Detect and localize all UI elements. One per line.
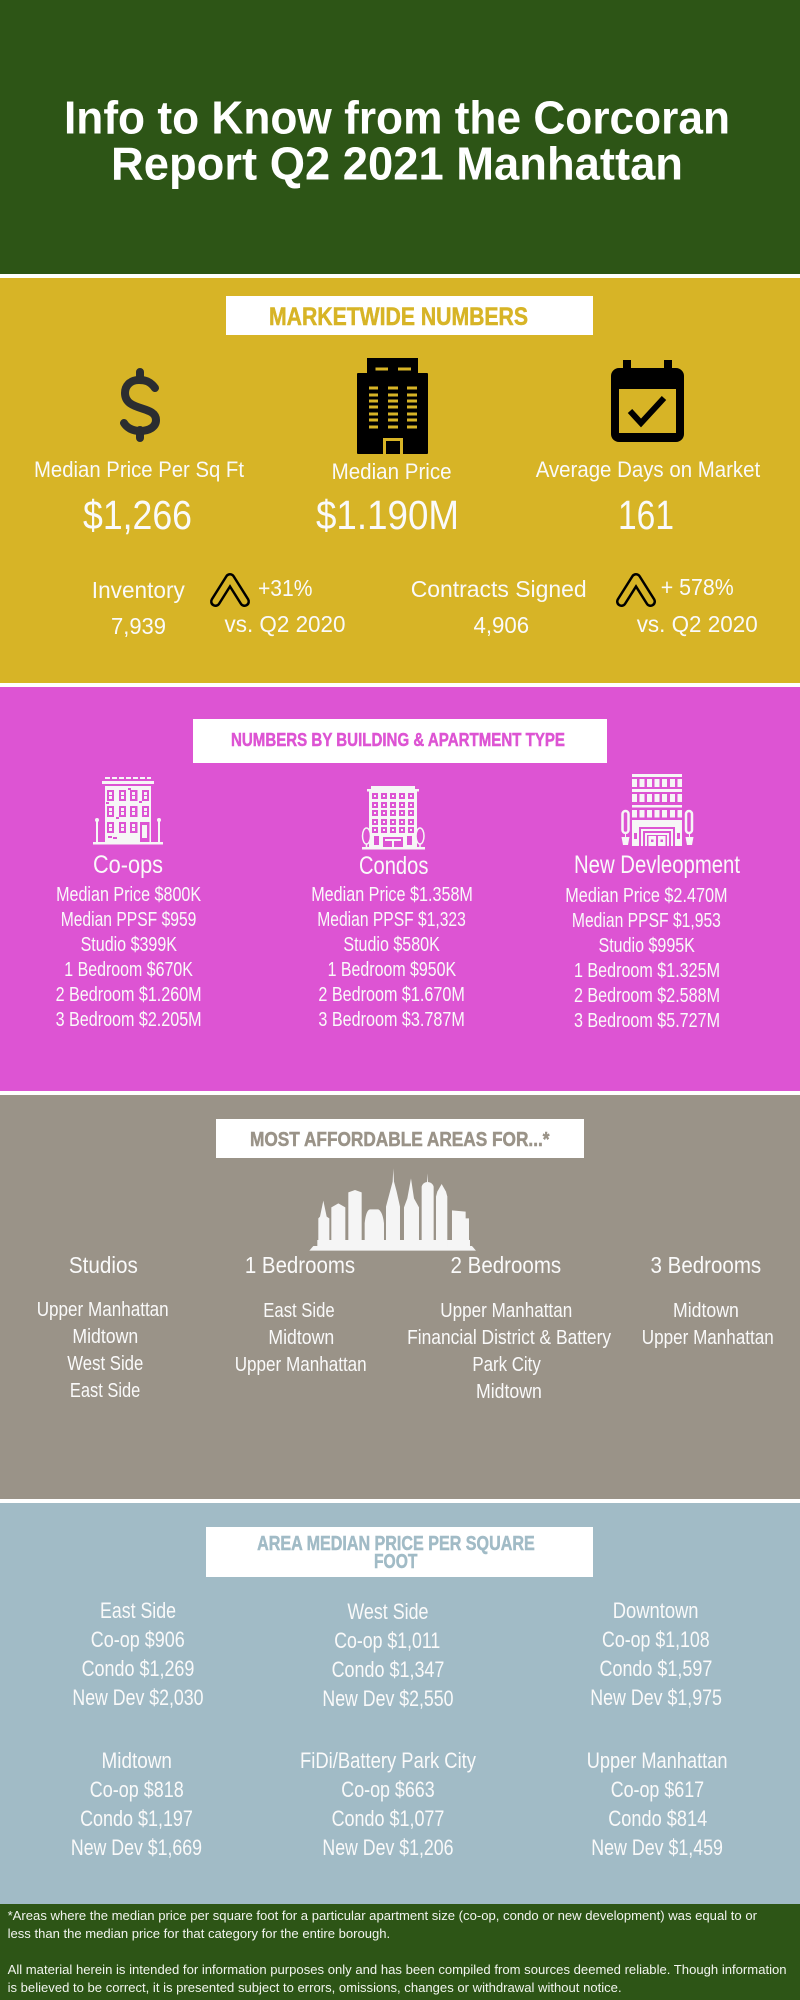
area: upper manhattan: Condo $814 xyxy=(608,1806,707,1831)
icon: dollar sign xyxy=(124,372,156,438)
list: co-op prices: Median Price $800K xyxy=(56,884,202,906)
list: new development prices: Median Price $2.470M xyxy=(565,885,728,907)
stat: average days on market xyxy=(536,457,760,538)
column: 1 bedrooms: Upper Manhattan xyxy=(235,1354,367,1376)
icon: office building xyxy=(357,358,428,454)
list: condo prices xyxy=(311,884,473,1031)
stat: median price per sq ft: $1,266 xyxy=(83,492,192,538)
label: condos: Condos xyxy=(359,852,428,880)
column: 2 bedrooms: Financial District & Battery xyxy=(407,1327,611,1349)
stat: inventory change: vs. Q2 2020 xyxy=(224,611,346,637)
area: west side xyxy=(322,1599,454,1711)
area: west side: Co-op $1,011 xyxy=(334,1628,440,1653)
panel: numbers by building and apartment type xyxy=(0,687,800,1091)
list: co-op prices: 1 Bedroom $670K xyxy=(64,959,193,981)
heading: marketwide numbers: MARKETWIDE NUMBERS xyxy=(269,303,528,331)
area: east side: Condo $1,269 xyxy=(82,1656,194,1681)
stat: average days on market: 161 xyxy=(618,492,674,538)
area: midtown xyxy=(71,1748,202,1860)
area: fidi battery park city: New Dev $1,206 xyxy=(322,1835,454,1860)
area: downtown: New Dev $1,975 xyxy=(590,1685,722,1710)
list: co-op prices: 3 Bedroom $2.205M xyxy=(56,1009,202,1031)
footnote: disclaimer: is believed to be correct, it is presented subject to errors, omissions, changes or withdrawal without notice. xyxy=(8,1980,622,1995)
column: 1 bedrooms: 1 Bedrooms xyxy=(245,1252,355,1278)
area: downtown xyxy=(590,1598,722,1710)
heading: area median price per square foot: AREA MEDIAN PRICE PER SQUARE xyxy=(257,1533,535,1555)
footnote: areas definition xyxy=(8,1908,758,1941)
column: studios: West Side xyxy=(67,1353,143,1375)
panel: most affordable areas xyxy=(0,1095,800,1499)
footnote: areas definition: *Areas where the median price per square foot for a particular apartment size (co-op, condo or new development) was equal to or xyxy=(8,1908,758,1923)
column: studios: Midtown xyxy=(72,1326,138,1348)
area: east side xyxy=(72,1598,204,1710)
icon: co-op building xyxy=(93,777,163,844)
list: new development prices: Studio $995K xyxy=(598,935,695,957)
stat: contracts change xyxy=(637,574,758,637)
stat: inventory: Inventory xyxy=(92,577,185,603)
column: 3 bedrooms: Upper Manhattan xyxy=(642,1327,774,1349)
footnote: disclaimer: All material herein is intended for information purposes only and has been compiled from sources deemed reliable. Though information xyxy=(8,1962,787,1977)
area: midtown: New Dev $1,669 xyxy=(71,1835,202,1860)
panel: title header xyxy=(0,0,800,274)
area: fidi battery park city: Co-op $663 xyxy=(341,1777,435,1802)
area: upper manhattan: New Dev $1,459 xyxy=(591,1835,723,1860)
list: condo prices: 3 Bedroom $3.787M xyxy=(318,1009,465,1031)
icon: calendar with check xyxy=(611,360,684,442)
column: 2 bedrooms: Park City xyxy=(472,1354,541,1376)
stat: median price per sq ft: Median Price Per Sq Ft xyxy=(34,457,244,482)
footnote: disclaimer xyxy=(8,1962,787,1995)
stat: contracts signed: 4,906 xyxy=(474,612,529,638)
title: Report Q2 2021 Manhattan xyxy=(111,138,683,190)
column: 1 bedrooms: East Side xyxy=(263,1300,335,1322)
area: fidi battery park city xyxy=(300,1748,476,1860)
stat: inventory: 7,939 xyxy=(111,613,166,639)
area: upper manhattan xyxy=(587,1748,728,1860)
panel: area median price per square foot xyxy=(0,1503,800,1904)
area: fidi battery park city: Condo $1,077 xyxy=(332,1806,444,1831)
heading: numbers by building type xyxy=(193,719,607,763)
area: upper manhattan: Co-op $617 xyxy=(611,1777,704,1802)
area: east side: Co-op $906 xyxy=(91,1627,185,1652)
area: midtown: Midtown xyxy=(102,1748,172,1773)
stat: inventory change xyxy=(224,575,346,637)
stat: contracts signed xyxy=(411,576,587,638)
list: condo prices: Studio $580K xyxy=(343,934,440,956)
stat: inventory xyxy=(92,577,185,639)
list: condo prices: 2 Bedroom $1.670M xyxy=(318,984,465,1006)
area: west side: Condo $1,347 xyxy=(332,1657,444,1682)
stat: contracts signed: Contracts Signed xyxy=(411,576,587,602)
list: new development prices xyxy=(565,885,728,1032)
column: studios: Studios xyxy=(69,1252,138,1278)
heading: most affordable areas xyxy=(216,1119,584,1158)
area: east side: New Dev $2,030 xyxy=(72,1685,204,1710)
list: co-op prices: Studio $399K xyxy=(81,934,178,956)
icon: up chevron contracts xyxy=(622,578,650,602)
label: co-ops: Co-ops xyxy=(93,851,163,879)
column: 2 bedrooms xyxy=(407,1252,611,1403)
heading: area median price per square foot: FOOT xyxy=(374,1551,417,1573)
icon: new development building xyxy=(622,774,694,846)
area: east side: East Side xyxy=(100,1598,176,1623)
area: west side: New Dev $2,550 xyxy=(322,1686,454,1711)
area: downtown: Condo $1,597 xyxy=(600,1656,712,1681)
column: 1 bedrooms: Midtown xyxy=(268,1327,334,1349)
list: condo prices: Median PPSF $1,323 xyxy=(317,909,466,931)
heading: marketwide numbers xyxy=(226,296,593,335)
area: downtown: Downtown xyxy=(613,1598,698,1623)
area: downtown: Co-op $1,108 xyxy=(602,1627,710,1652)
stat: average days on market: Average Days on Market xyxy=(536,457,760,482)
list: new development prices: 3 Bedroom $5.727M xyxy=(574,1010,720,1032)
icon: city skyline xyxy=(309,1168,476,1251)
list: co-op prices: 2 Bedroom $1.260M xyxy=(56,984,202,1006)
list: new development prices: 1 Bedroom $1.325M xyxy=(574,960,720,982)
stat: inventory change: +31% xyxy=(258,575,312,601)
column: 2 bedrooms: 2 Bedrooms xyxy=(450,1252,561,1278)
column: 3 bedrooms xyxy=(642,1252,774,1349)
heading: area median price per square foot xyxy=(206,1527,593,1577)
list: condo prices: Median Price $1.358M xyxy=(311,884,473,906)
column: studios: Upper Manhattan xyxy=(37,1299,169,1321)
column: 2 bedrooms: Upper Manhattan xyxy=(440,1300,572,1322)
stat: contracts change: + 578% xyxy=(661,574,734,600)
list: co-op prices xyxy=(56,884,202,1031)
list: new development prices: 2 Bedroom $2.588M xyxy=(574,985,720,1007)
column: 3 bedrooms: Midtown xyxy=(673,1300,739,1322)
icon: condo building xyxy=(362,786,425,850)
stat: median price per sq ft xyxy=(34,457,244,538)
list: new development prices: Median PPSF $1,953 xyxy=(572,910,721,932)
column: 1 bedrooms xyxy=(235,1252,367,1376)
stat: median price: Median Price xyxy=(332,459,452,484)
area: midtown: Co-op $818 xyxy=(90,1777,184,1802)
list: condo prices: 1 Bedroom $950K xyxy=(328,959,457,981)
panel: marketwide numbers xyxy=(0,278,800,683)
heading: numbers by building type: NUMBERS BY BUILDING & APARTMENT TYPE xyxy=(231,729,565,750)
stat: contracts change: vs. Q2 2020 xyxy=(637,611,758,637)
area: midtown: Condo $1,197 xyxy=(80,1806,193,1831)
list: co-op prices: Median PPSF $959 xyxy=(61,909,196,931)
stat: median price: $1.190M xyxy=(316,492,459,538)
title: Info to Know from the Corcoran xyxy=(64,92,730,144)
title xyxy=(64,92,730,190)
heading: most affordable areas: MOST AFFORDABLE AREAS FOR...* xyxy=(250,1129,550,1151)
panel: footer notes xyxy=(0,1904,800,2000)
column: studios: East Side xyxy=(70,1380,140,1402)
footnote: areas definition: less than the median price for that category for the entire borough. xyxy=(8,1926,390,1941)
icon: up chevron inventory xyxy=(216,578,244,602)
column: 2 bedrooms: Midtown xyxy=(476,1381,542,1403)
area: west side: West Side xyxy=(347,1599,428,1624)
area: fidi battery park city: FiDi/Battery Park City xyxy=(300,1748,476,1773)
area: upper manhattan: Upper Manhattan xyxy=(587,1748,728,1773)
label: new development: New Devleopment xyxy=(574,851,740,879)
column: studios xyxy=(37,1252,169,1402)
stat: median price xyxy=(316,459,459,538)
column: 3 bedrooms: 3 Bedrooms xyxy=(650,1252,761,1278)
